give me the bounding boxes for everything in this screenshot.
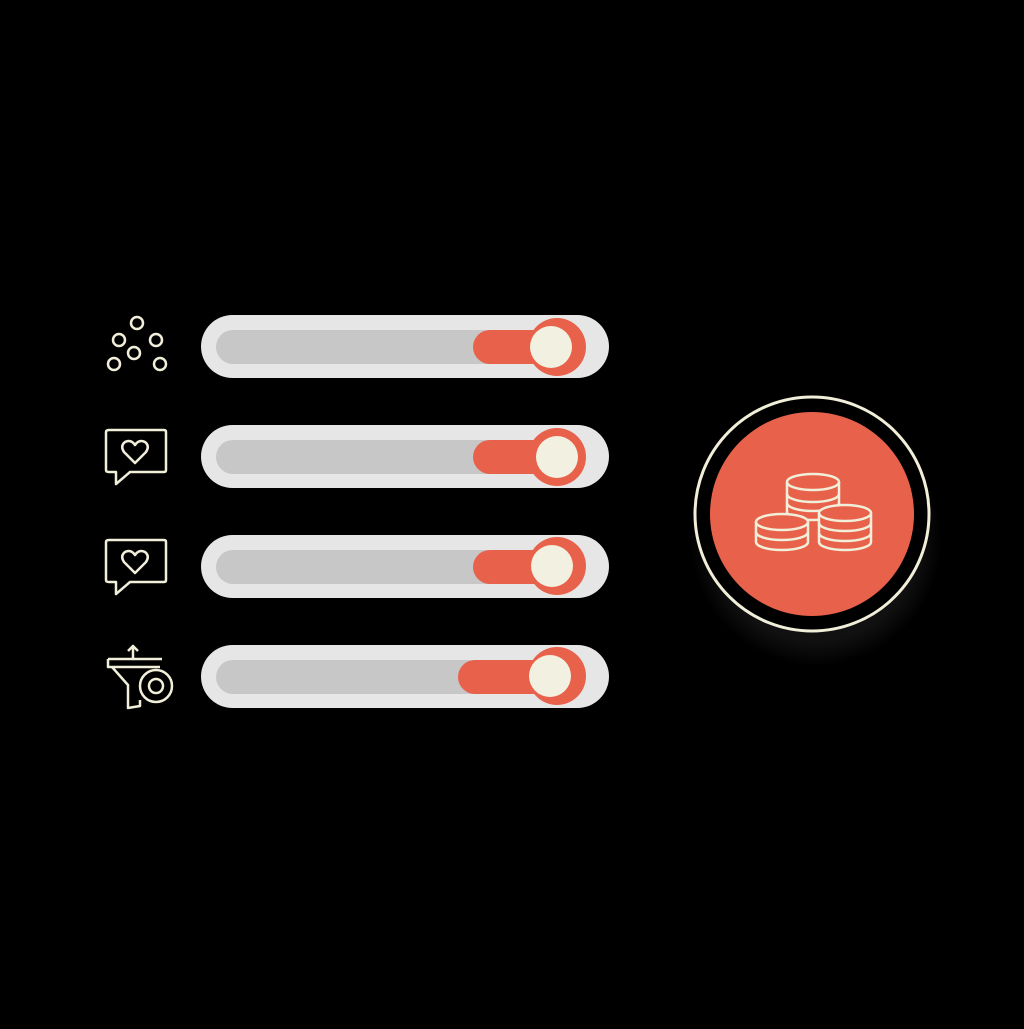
icon: funnel target [108, 646, 172, 708]
icon: heart chat 2 [106, 540, 166, 594]
slider 1 [201, 315, 609, 378]
icon: heart chat 1 [106, 430, 166, 484]
coin button [690, 397, 942, 666]
slider 3 [201, 535, 609, 598]
slider 4 [201, 645, 609, 708]
icon: dots cluster [108, 317, 166, 370]
slider 2 [201, 425, 609, 488]
icon: coins [756, 474, 871, 550]
